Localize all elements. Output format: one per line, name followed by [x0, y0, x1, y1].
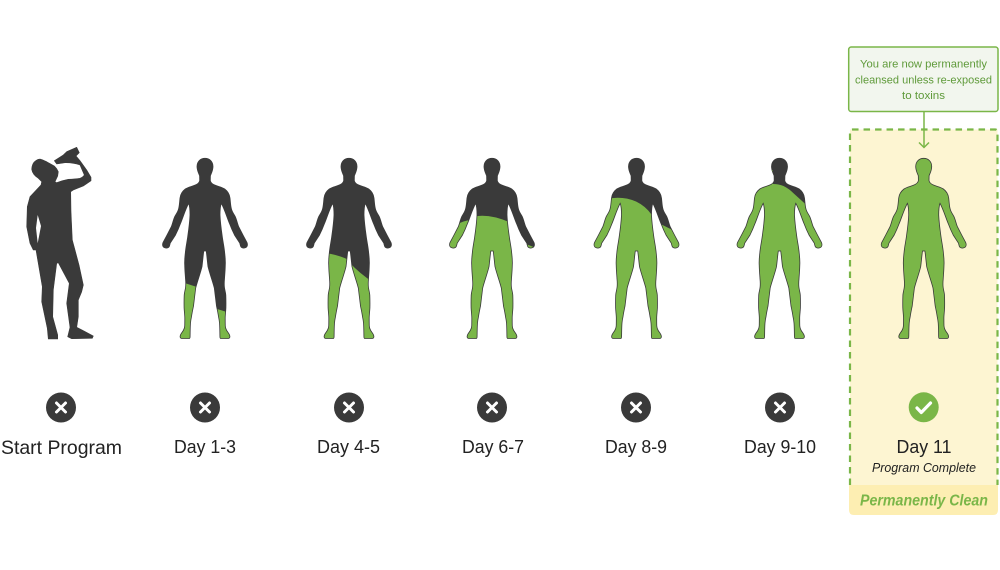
- figure: day 9-10 body: [736, 158, 822, 339]
- label: start program: Start Program: [1, 437, 122, 459]
- label: day 6-7: Day 6-7: [462, 437, 524, 457]
- label: day 8-9: Day 8-9: [605, 437, 667, 457]
- status icon: day 4-5: [334, 392, 364, 422]
- status icon: start program: [46, 392, 76, 422]
- status icon: day 11 check: [909, 392, 939, 422]
- callout: permanently cleansed note: You are now permanently: [860, 58, 988, 70]
- figure: man drinking from bottle: [27, 147, 93, 339]
- figure: day 4-5 body: [307, 158, 391, 345]
- figure: day 11 body: [881, 158, 966, 338]
- arrow: callout to figure: [919, 112, 929, 148]
- figure: day 6-7 body: [449, 158, 535, 339]
- status icon: day 9-10: [765, 392, 795, 422]
- callout: permanently cleansed note: to toxins: [902, 90, 946, 102]
- status icon: day 6-7: [477, 392, 507, 422]
- banner: permanently clean: [849, 485, 998, 515]
- label: day 9-10: Day 9-10: [744, 437, 816, 457]
- label: day 11: Day 11: [896, 437, 952, 457]
- callout: permanently cleansed note: cleansed unless re-exposed: [855, 74, 992, 86]
- status icon: day 1-3: [190, 392, 220, 422]
- label: program complete: Program Complete: [872, 460, 976, 475]
- callout: permanently cleansed note: [849, 47, 998, 112]
- status icon: day 8-9: [621, 392, 651, 422]
- figure: day 8-9 body: [594, 158, 680, 339]
- panel: permanently clean highlight: [850, 130, 998, 486]
- label: day 4-5: Day 4-5: [317, 437, 380, 457]
- figure: day 1-3 body: [163, 158, 247, 345]
- banner: permanently clean: Permanently Clean: [860, 492, 988, 510]
- label: day 1-3: Day 1-3: [174, 437, 236, 457]
